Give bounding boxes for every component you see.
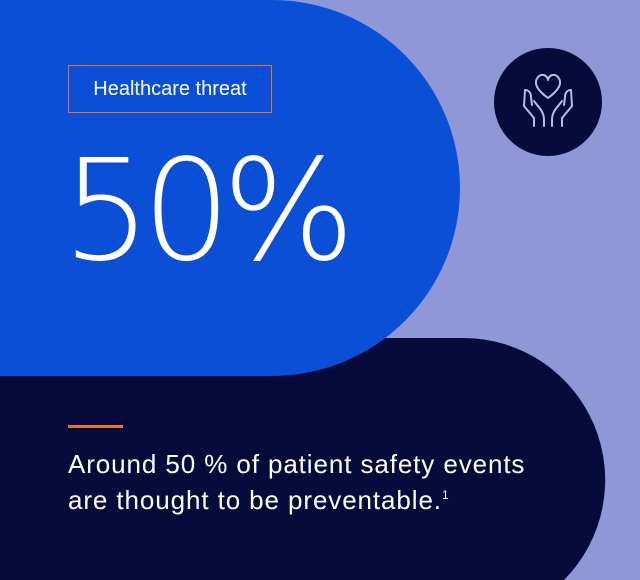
big number 50%: 50% [62, 130, 346, 293]
label: Healthcare threat: Healthcare threat [93, 78, 247, 100]
panel: blue upper shape [0, 0, 460, 376]
icon: hands with heart [494, 48, 602, 156]
divider accent: orange line [68, 425, 123, 428]
text block: description [68, 449, 525, 515]
text block: description: are thought to be preventable.1 [68, 485, 450, 515]
text block: description: Around 50 % of patient safety events [68, 449, 525, 479]
label: Healthcare threat [68, 65, 272, 113]
